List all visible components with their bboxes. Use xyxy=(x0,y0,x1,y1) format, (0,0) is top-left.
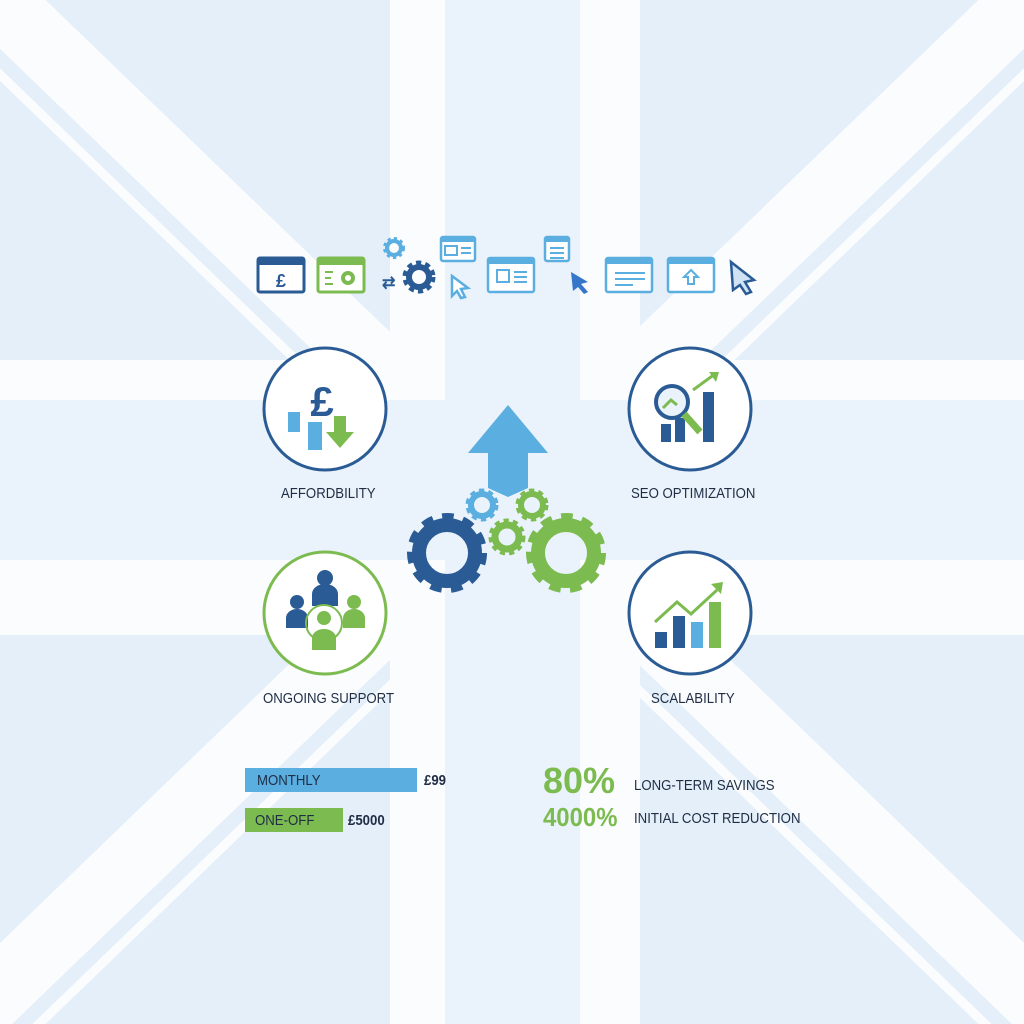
icon: small windows and cursors xyxy=(441,237,714,298)
bar: monthly: MONTHLY xyxy=(257,772,321,789)
stat: 4000%: 4000% xyxy=(543,802,617,832)
value: one-off: £5000 xyxy=(348,812,385,829)
panel: seo xyxy=(628,346,752,472)
gears xyxy=(412,491,601,588)
panel: ongoing support xyxy=(262,550,388,676)
icon: settings window xyxy=(318,258,364,292)
panel: affordability: £ xyxy=(310,378,334,425)
panel: affordability xyxy=(262,346,388,472)
bar: monthly xyxy=(245,768,417,792)
stat: 80%: LONG-TERM SAVINGS xyxy=(634,777,775,794)
stat: 80%: 80% xyxy=(543,760,615,801)
central arrow and gears xyxy=(407,405,606,593)
heading: scalability: SCALABILITY xyxy=(651,690,735,707)
icon: pound window xyxy=(258,258,304,292)
icon: pound window: £ xyxy=(276,271,286,291)
arrow xyxy=(468,405,548,497)
icon: arrows: ⇄ xyxy=(382,275,395,292)
heading: affordability: AFFORDBILITY xyxy=(281,485,376,502)
bar: one-off: ONE-OFF xyxy=(255,812,314,829)
icon: gears xyxy=(385,239,433,291)
heading: seo: SEO OPTIMIZATION xyxy=(631,485,755,502)
panel: scalability xyxy=(628,550,752,676)
heading: ongoing support: ONGOING SUPPORT xyxy=(263,690,394,707)
top icon row xyxy=(256,236,757,300)
stat: 4000%: INITIAL COST REDUCTION xyxy=(634,810,800,827)
stat: 4000% xyxy=(543,802,800,832)
bar: one-off xyxy=(245,808,343,832)
stat: 80% xyxy=(543,760,775,801)
value: monthly: £99 xyxy=(424,772,446,789)
